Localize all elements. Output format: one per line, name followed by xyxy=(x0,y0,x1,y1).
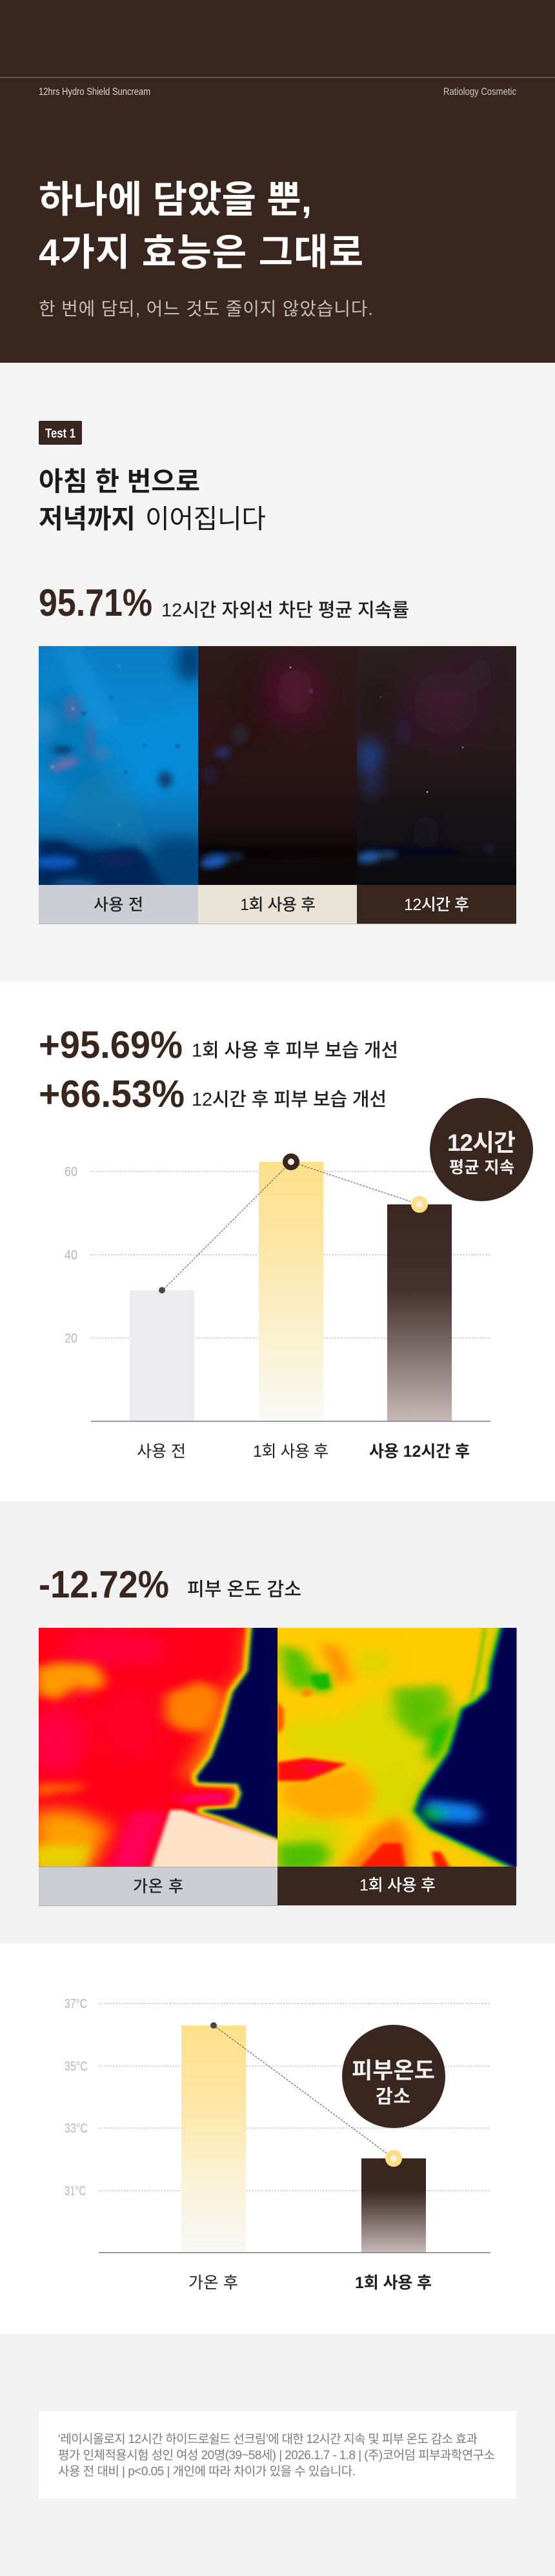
tag: Test 1 xyxy=(39,421,82,445)
axis labels: 60 xyxy=(65,1165,77,1179)
bar: before use xyxy=(130,1290,194,1421)
stat: -12.72%: -12.72% xyxy=(39,1563,169,1606)
bar: after 12 hours xyxy=(387,1204,452,1421)
stat: +95.69%: +95.69% xyxy=(39,1024,183,1066)
callout: 12 hour average: 평균 지속 xyxy=(449,1159,514,1177)
axis labels: 33°C xyxy=(65,2122,88,2136)
stat: 95.71%: 95.71% xyxy=(39,582,152,624)
tag: Test 1: Test 1 xyxy=(45,427,76,441)
caption: after one use xyxy=(278,1867,516,1905)
footnote box: 평가 인체적용시험 성인 여성 20명(39~58세) | 2026.1.7 - 1.8 | (주)코어덤 피부과학연구소 xyxy=(58,2448,495,2462)
panel: test 1 UV protection xyxy=(0,363,555,982)
heading: 아침 한 번으로 xyxy=(39,467,200,496)
stat label: after one use: 1회 사용 후 피부 보습 개선 xyxy=(192,1040,398,1061)
category labels: 사용 12시간 후 xyxy=(369,1443,470,1461)
panel: skin temperature images xyxy=(0,1501,555,1943)
caption: after one use: 1회 사용 후 xyxy=(359,1876,436,1894)
callout: skin temperature reduced: 피부온도 xyxy=(352,2058,435,2084)
product name: 12hrs Hydro Shield Suncream xyxy=(39,86,150,97)
heading xyxy=(39,467,266,534)
caption: 12 hours after xyxy=(357,885,516,924)
title: 4가지 효능은 그대로 xyxy=(39,232,363,274)
axis labels: 35°C xyxy=(65,2060,88,2074)
stat: +66.53%: +66.53% xyxy=(39,1073,185,1115)
callout: 12 hour average xyxy=(430,1098,533,1201)
brand name: Ratiology Cosmetic xyxy=(443,86,516,97)
callout: 12 hour average: 12시간 xyxy=(447,1130,516,1156)
category labels xyxy=(137,1443,470,1461)
trend line xyxy=(162,1162,419,1291)
dot: after one use xyxy=(385,2150,402,2167)
subtitle: 한 번에 담되, 어느 것도 줄이지 않았습니다. xyxy=(39,299,373,319)
axis labels: 31°C xyxy=(65,2184,86,2198)
footnote box xyxy=(39,2411,516,2499)
callout: skin temperature reduced: 감소 xyxy=(376,2086,410,2107)
category labels: 가온 후 xyxy=(188,2274,238,2292)
heading: 이어집니다 xyxy=(145,504,266,534)
caption: after heating xyxy=(39,1867,278,1905)
panel: header xyxy=(0,0,555,363)
footnote box: 사용 전 대비 | p<0.05 | 개인에 따라 차이가 있을 수 있습니다. xyxy=(58,2464,356,2479)
caption: after one use xyxy=(198,885,357,924)
thermal image: after heating xyxy=(39,1628,278,1867)
axis labels: 40 xyxy=(65,1248,77,1263)
panel: footnote xyxy=(0,2334,555,2576)
title xyxy=(39,179,363,274)
caption: after heating: 가온 후 xyxy=(133,1878,183,1896)
footnote box: ‘레이시올로지 12시간 하이드로쉴드 선크림’에 대한 12시간 지속 및 피부 온도 감소 효과 xyxy=(58,2432,478,2446)
axis labels: 37°C xyxy=(65,1997,87,2011)
callout: skin temperature reduced xyxy=(342,2025,445,2128)
bar: after one use xyxy=(259,1162,323,1421)
axis labels xyxy=(65,1165,77,1346)
panel: skin temperature chart xyxy=(65,1997,490,2292)
bar: after heating xyxy=(181,2025,246,2253)
category labels: 1회 사용 후 xyxy=(355,2274,432,2292)
caption: 12 hours after: 12시간 후 xyxy=(404,896,469,914)
panel: moisture results xyxy=(39,1024,533,1461)
dot: after one use xyxy=(283,1153,299,1170)
caption: after one use: 1회 사용 후 xyxy=(240,896,316,914)
thermal image: after one use xyxy=(278,1619,532,1875)
photo: before use xyxy=(39,646,198,885)
dot: after heating xyxy=(210,2022,217,2029)
trend line xyxy=(214,2025,394,2158)
category labels xyxy=(188,2274,432,2292)
axis labels xyxy=(65,1997,88,2198)
caption: before use: 사용 전 xyxy=(94,896,143,914)
bar chart: skin temperature xyxy=(65,1997,490,2292)
bar: after one use xyxy=(361,2158,426,2253)
category labels: 사용 전 xyxy=(137,1443,186,1461)
stat label: 피부 온도 감소 xyxy=(187,1579,301,1600)
stat label: 12시간 자외선 차단 평균 지속률 xyxy=(161,600,409,621)
category labels: 1회 사용 후 xyxy=(253,1443,328,1461)
caption: before use xyxy=(39,885,198,924)
photo: 12 hours after xyxy=(356,646,516,885)
axis labels: 20 xyxy=(65,1332,77,1346)
dot: after 12 hours xyxy=(411,1196,428,1213)
title: 하나에 담았을 뿐, xyxy=(39,179,312,221)
dot: before use xyxy=(159,1287,165,1293)
heading: 저녁까지 xyxy=(39,504,136,534)
stat label: after 12 hours: 12시간 후 피부 보습 개선 xyxy=(192,1089,387,1110)
bar chart: moisture xyxy=(65,1153,490,1461)
photo: after one use xyxy=(192,646,357,885)
